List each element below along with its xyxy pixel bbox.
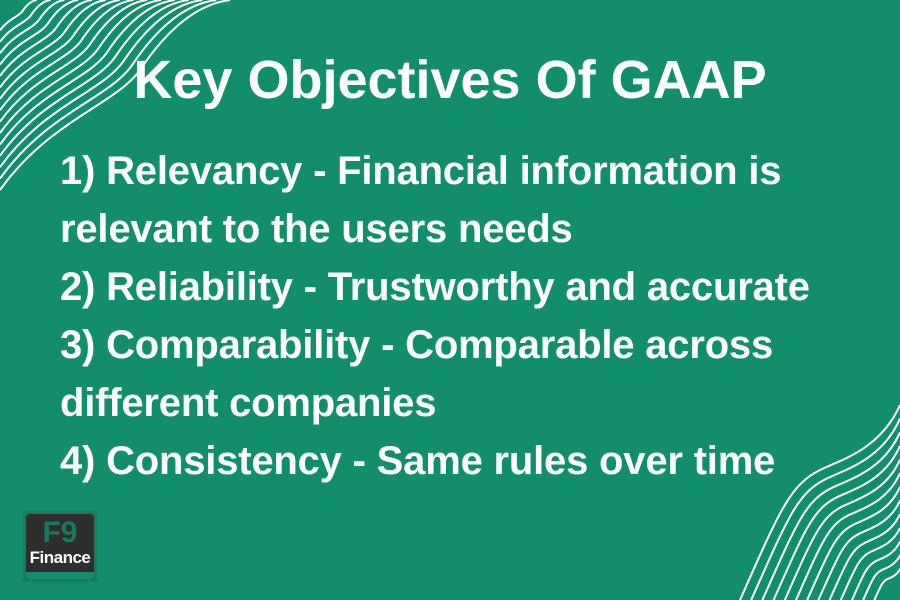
logo: F9 Finance: Finance (30, 548, 90, 567)
logo: F9 Finance (23, 511, 97, 582)
text block: objectives list: 4) Consistency - Same rules over time (60, 439, 775, 483)
text block: objectives list: 2) Reliability - Trustworthy and accurate (60, 265, 810, 309)
text block: objectives list (60, 149, 810, 483)
text block: objectives list: 3) Comparability - Comparable across (60, 323, 773, 367)
logo: F9 Finance: F9 (42, 516, 78, 549)
title: Key Objectives Of GAAP (133, 50, 767, 110)
text block: objectives list: relevant to the users needs (60, 207, 573, 251)
text block: objectives list: 1) Relevancy - Financial information is (60, 149, 781, 193)
text block: objectives list: different companies (60, 381, 436, 425)
